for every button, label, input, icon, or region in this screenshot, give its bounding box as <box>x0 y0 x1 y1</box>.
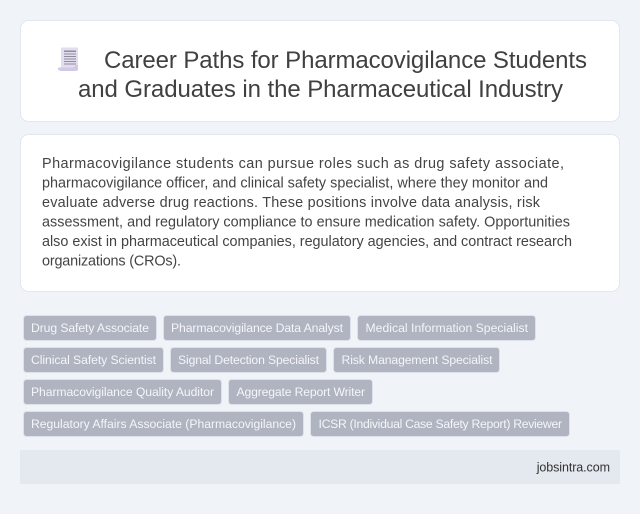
tag: Pharmacovigilance Quality Auditor <box>24 380 222 404</box>
tag: Clinical Safety Scientist: Clinical Safety Scientist <box>31 353 157 367</box>
heading: title: and Graduates in the Pharmaceutical Industry <box>78 76 563 103</box>
text block: description <box>42 156 572 270</box>
heading: title: Career Paths for Pharmacovigilance Students <box>104 47 587 74</box>
tag: Risk Management Specialist <box>334 348 500 372</box>
tag: Drug Safety Associate: Drug Safety Associate <box>31 321 149 335</box>
panel: description <box>20 134 620 292</box>
tag: Pharmacovigilance Data Analyst <box>164 316 350 340</box>
icon: document scroll <box>58 48 78 71</box>
text block: description: evaluate adverse drug reactions. These positions involve data analysis, risk <box>42 195 541 211</box>
tag: ICSR (Individual Case Safety Report) Reviewer <box>310 412 570 436</box>
tag list: career roles <box>24 316 570 436</box>
text block: description: Pharmacovigilance students can pursue roles such as drug safety associate, <box>42 156 564 172</box>
tag: Pharmacovigilance Quality Auditor: Pharmacovigilance Quality Auditor <box>31 385 214 399</box>
footer text: source: jobsintra.com <box>536 460 610 474</box>
tag: Aggregate Report Writer <box>228 380 372 404</box>
tag: Medical Information Specialist <box>358 316 536 340</box>
text block: description: organizations (CROs). <box>42 254 181 270</box>
heading: title <box>78 47 587 103</box>
tag: Risk Management Specialist: Risk Management Specialist <box>342 353 493 367</box>
tag: Medical Information Specialist: Medical Information Specialist <box>366 321 529 335</box>
footer bar <box>20 450 620 484</box>
tag: Aggregate Report Writer: Aggregate Report Writer <box>236 385 365 399</box>
tag: Drug Safety Associate <box>24 316 156 340</box>
text block: description: assessment, and regulatory compliance to ensure medication safety. Opportunities <box>42 214 570 230</box>
tag: ICSR (Individual Case Safety Report) Reviewer: ICSR (Individual Case Safety Report) Reviewer <box>318 417 562 431</box>
text block: description: also exist in pharmaceutical companies, regulatory agencies, and contract research <box>42 234 572 250</box>
tag: Regulatory Affairs Associate (Pharmacovigilance): Regulatory Affairs Associate (Pharmacovigilance) <box>31 417 296 431</box>
panel: title card <box>20 20 620 122</box>
tag: Regulatory Affairs Associate (Pharmacovigilance) <box>24 412 304 436</box>
tag: Clinical Safety Scientist <box>24 348 164 372</box>
text block: description: pharmacovigilance officer, and clinical safety specialist, where they monitor and <box>42 176 548 192</box>
tag: Signal Detection Specialist: Signal Detection Specialist <box>178 353 320 367</box>
tag: Signal Detection Specialist <box>170 348 326 372</box>
tag: Pharmacovigilance Data Analyst: Pharmacovigilance Data Analyst <box>171 321 344 335</box>
